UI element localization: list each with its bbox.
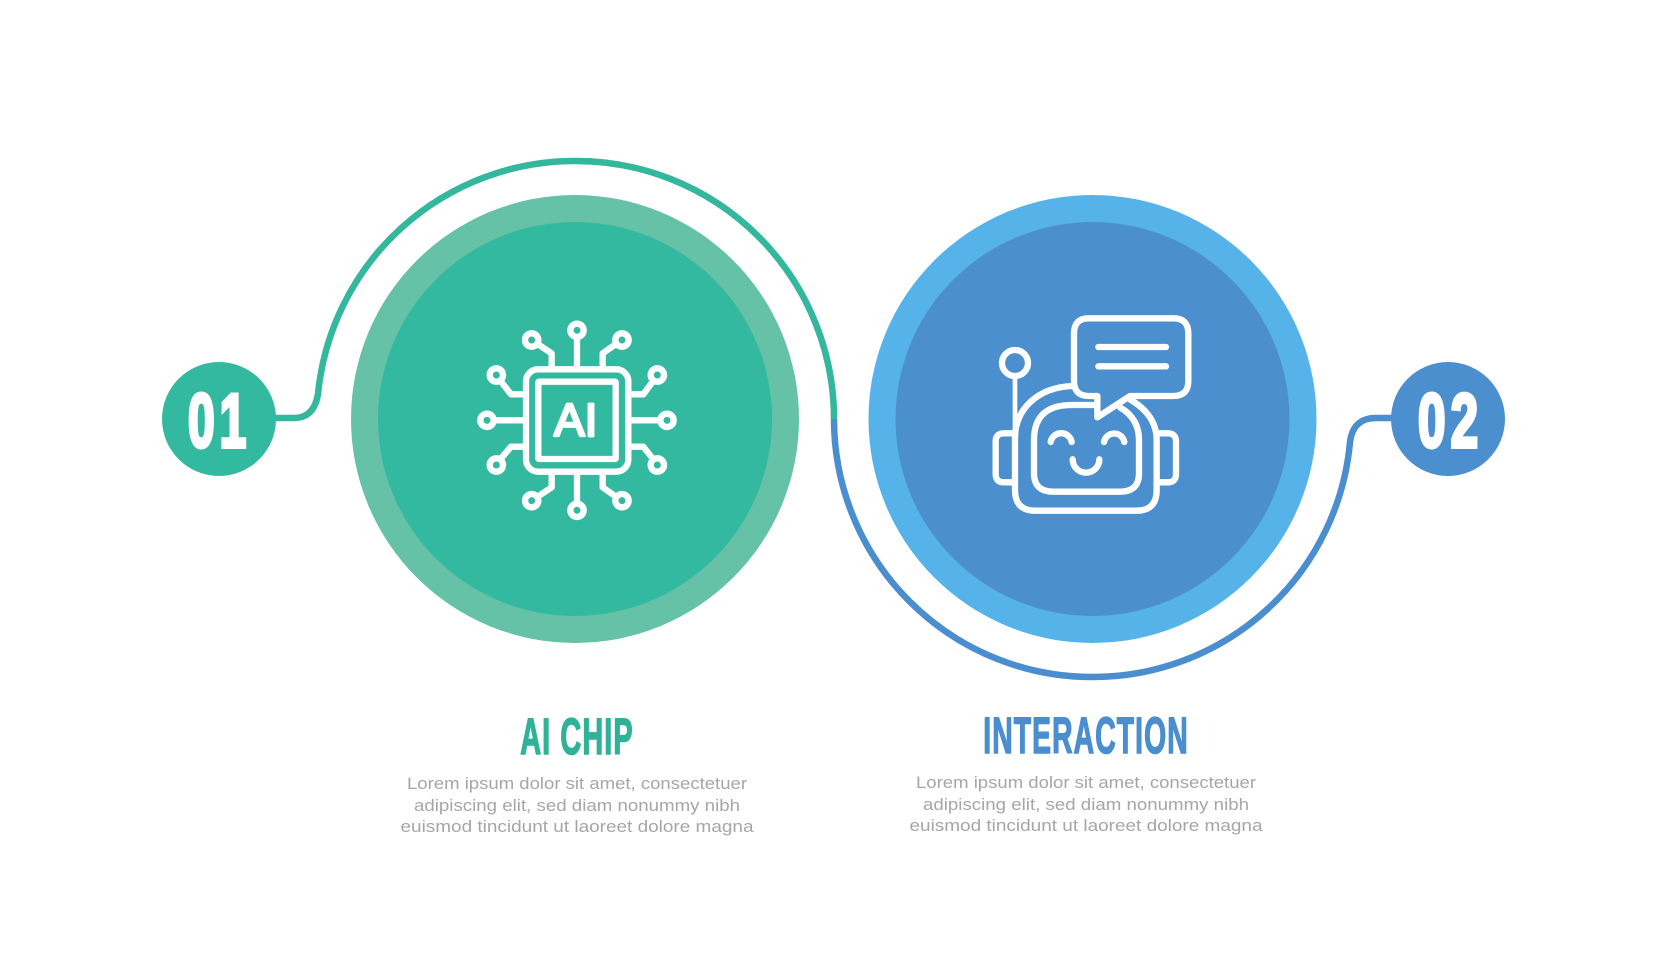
- badge: 02: [1391, 362, 1505, 476]
- connector line: green: [270, 161, 834, 419]
- badge: 01: [162, 362, 276, 476]
- panel: step 2 circle: [868, 195, 1316, 643]
- badge: 01: 01: [188, 380, 251, 464]
- text block: INTERACTION description: euismod tincidunt ut laoreet dolore magna: [910, 816, 1263, 835]
- panel: step 1 circle: [351, 195, 799, 643]
- heading: INTERACTION: INTERACTION: [983, 707, 1189, 764]
- icon: AI chip: [480, 324, 674, 517]
- text block: AI CHIP description: euismod tincidunt ut laoreet dolore magna: [400, 817, 754, 836]
- text block: INTERACTION description: adipiscing elit, sed diam nonummy nibh: [923, 795, 1249, 814]
- heading: AI CHIP: AI CHIP: [520, 708, 634, 765]
- text block: INTERACTION description: Lorem ipsum dolor sit amet, consectetuer: [916, 773, 1256, 792]
- badge: 02: 02: [1418, 378, 1483, 464]
- icon: robot with speech bubble: [996, 318, 1188, 511]
- text block: AI CHIP description: adipiscing elit, sed diam nonummy nibh: [414, 796, 740, 815]
- connector line: blue: [834, 418, 1398, 677]
- text block: AI CHIP description: Lorem ipsum dolor sit amet, consectetuer: [407, 774, 747, 793]
- icon: AI chip: AI: [554, 394, 597, 446]
- text block: INTERACTION description: [910, 773, 1263, 835]
- text block: AI CHIP description: [400, 774, 754, 836]
